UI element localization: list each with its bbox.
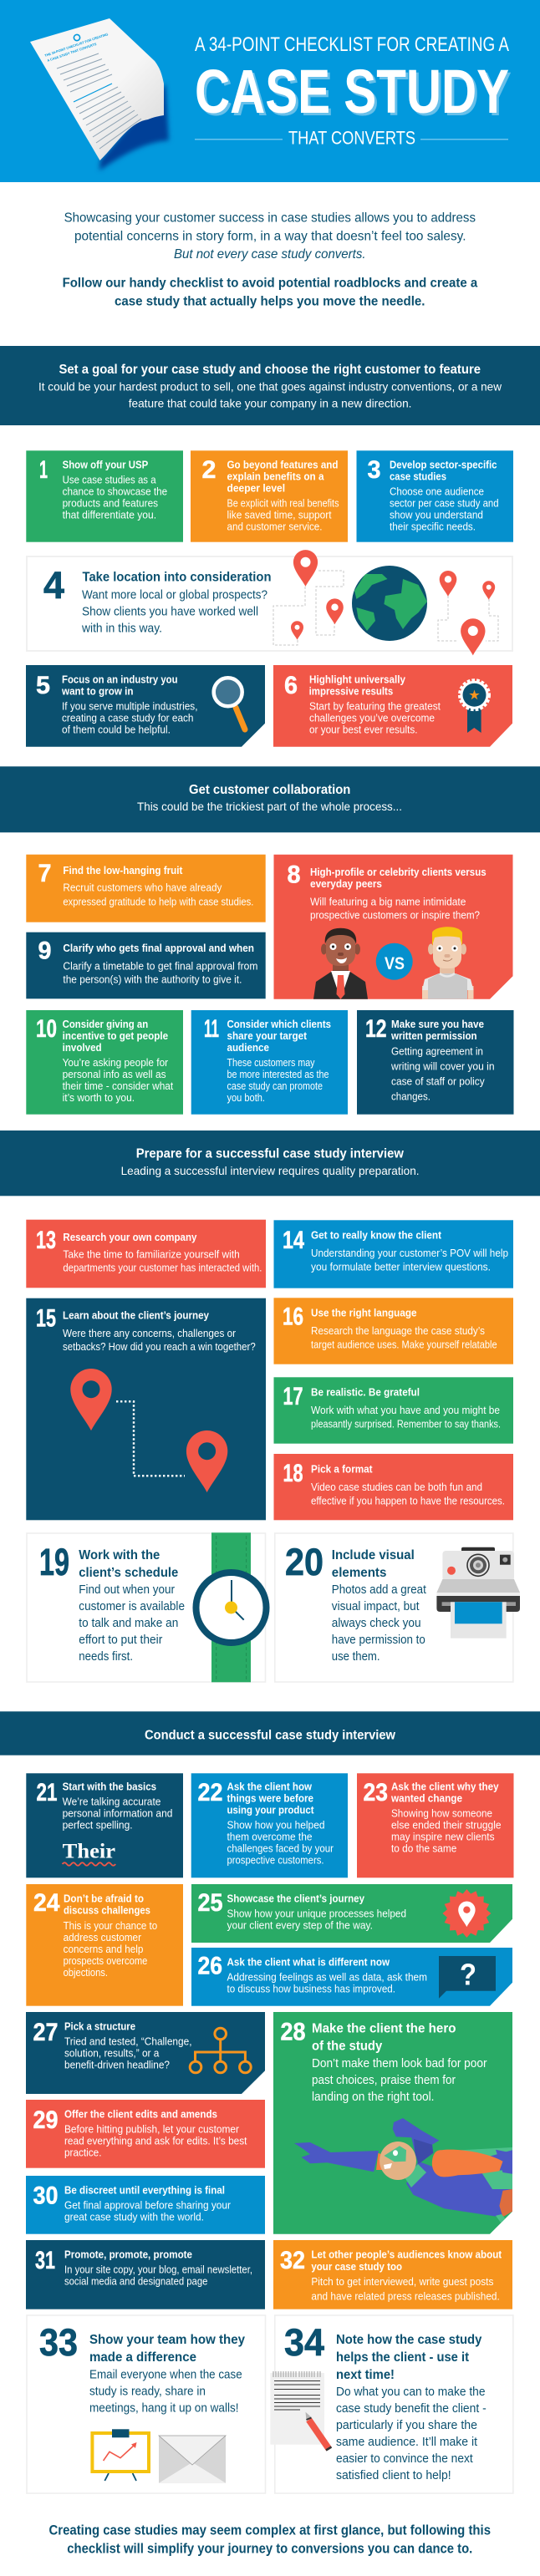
panel: card 25: 25 bbox=[197, 1889, 222, 1917]
icon: vs badge: VS bbox=[385, 954, 405, 973]
icon: hierarchy structure bbox=[190, 2028, 251, 2073]
panel: card 33: made a difference bbox=[89, 2350, 196, 2365]
panel: card 28 bbox=[273, 2012, 512, 2234]
panel: card 4 location: 4 bbox=[43, 564, 64, 607]
panel: card 19: Find out when your bbox=[79, 1583, 175, 1597]
panel: card 19: Work with the bbox=[79, 1548, 160, 1562]
panel: card 33: Show your team how they bbox=[89, 2333, 245, 2347]
icon: magnifying glass bbox=[214, 678, 245, 729]
panel: card 21: 21 bbox=[37, 1779, 57, 1806]
panel: card 7 bbox=[26, 855, 266, 922]
panel: card 27: Tried and tested, “Challenge, bbox=[64, 2036, 192, 2048]
panel: card 13: Take the time to familiarize yourself with bbox=[63, 1249, 240, 1261]
panel: card 4 location: with in this way. bbox=[81, 622, 162, 635]
panel: card 34: next time! bbox=[336, 2368, 395, 2382]
panel: card 4 location bbox=[27, 550, 512, 655]
panel: card 21: We’re talking accurate bbox=[63, 1796, 160, 1808]
intro text: potential concerns in story form, in a way that doesn’t feel too salesy. bbox=[74, 230, 466, 244]
panel: card 12: written permission bbox=[390, 1029, 477, 1042]
intro text: case study that actually helps you move the needle. bbox=[115, 294, 425, 308]
panel: card 1: Use case studies as a bbox=[63, 474, 156, 485]
panel: card 15: setbacks? How did you reach a win together? bbox=[63, 1341, 256, 1353]
panel: card 1: chance to showcase the bbox=[63, 486, 167, 498]
panel: card 32: Let other people’s audiences know about bbox=[311, 2248, 502, 2261]
panel: card 28: past choices, praise them for bbox=[312, 2074, 456, 2087]
icon: flying superhero bbox=[294, 2118, 512, 2223]
icon: presentation easel bbox=[92, 2429, 149, 2481]
panel: card 11: case study can promote bbox=[227, 1080, 323, 1092]
panel: card 16: 16 bbox=[283, 1303, 303, 1331]
closing statement: Creating case studies may seem complex at first glance, but following this bbox=[48, 2523, 491, 2538]
panel: card 29: practice. bbox=[64, 2147, 102, 2159]
panel: card 16: target audience uses. Make yourself relatable bbox=[311, 1339, 497, 1351]
panel: card 20: use them. bbox=[332, 1650, 380, 1664]
panel: card 11: 11 bbox=[204, 1015, 219, 1043]
panel: card 26 bbox=[191, 1948, 512, 2006]
panel: card 29: Offer the client edits and amends bbox=[64, 2108, 217, 2121]
panel: card 17: pleasantly surprised. Remember to say thanks. bbox=[311, 1419, 501, 1430]
panel: card 3: their specific needs. bbox=[390, 521, 476, 533]
panel: card 19: customer is available bbox=[79, 1600, 185, 1613]
panel: card 32: Pitch to get interviewed, write guest posts bbox=[311, 2276, 493, 2288]
panel: card 25 bbox=[191, 1884, 512, 1943]
icon: envelope bbox=[159, 2436, 226, 2483]
icon: checklist paper: THE 34-POINT CHECKLIST FOR CREATING bbox=[44, 32, 109, 58]
panel: card 17: Be realistic. Be grateful bbox=[311, 1386, 420, 1399]
section band: prepare for interview: Prepare for a successful case study interview bbox=[136, 1147, 404, 1161]
icon: question speech bubble: ? bbox=[460, 1958, 476, 1992]
panel: card 5: creating a case study for each bbox=[62, 712, 194, 724]
panel: card 10: 10 bbox=[36, 1015, 57, 1043]
panel: card 13: Research your own company bbox=[63, 1231, 197, 1243]
panel: card 14 bbox=[274, 1220, 513, 1288]
icon: everyday person bbox=[422, 927, 473, 999]
panel: card 7: Recruit customers who have already bbox=[63, 882, 222, 894]
panel: card 11: Consider which clients bbox=[227, 1018, 331, 1030]
intro text: Showcasing your customer success in case studies allows you to address bbox=[64, 211, 476, 226]
panel: card 4 location: Take location into consideration bbox=[82, 571, 271, 585]
panel: card 30: Get final approval before sharing your bbox=[64, 2200, 231, 2212]
panel: card 6: challenges you’ve overcome bbox=[309, 712, 435, 724]
icon: pin starburst bbox=[442, 1889, 491, 1938]
panel: card 22: Ask the client how bbox=[227, 1781, 313, 1793]
panel: card 13 bbox=[26, 1220, 266, 1288]
panel: card 12: 12 bbox=[365, 1015, 386, 1043]
intro text bbox=[63, 211, 477, 308]
panel: card 5: If you serve multiple industries, bbox=[62, 700, 197, 712]
panel: card 19 bbox=[27, 1532, 266, 1682]
panel: card 34 bbox=[270, 2315, 513, 2493]
panel: card 6: 6 bbox=[284, 672, 298, 699]
icon: businessman bbox=[313, 928, 368, 999]
panel: card 30 bbox=[26, 2176, 265, 2234]
panel: card 2: explain benefits on a bbox=[227, 470, 324, 482]
panel: card 6: Highlight universally bbox=[309, 673, 406, 686]
section band: set a goal: feature that could take your company in a new direction. bbox=[129, 397, 411, 410]
panel: card 28: Make the client the hero bbox=[312, 2022, 456, 2036]
panel: card 28: 28 bbox=[281, 2019, 306, 2046]
panel: card 28: of the study bbox=[312, 2040, 382, 2054]
panel: card 30: Be discreet until everything is final bbox=[64, 2184, 225, 2197]
panel: card 26: to discuss how business has improved. bbox=[227, 1984, 395, 1995]
panel: card 25: your client every step of the way. bbox=[227, 1920, 373, 1932]
panel: card 10: You’re asking people for bbox=[63, 1057, 168, 1069]
panel: card 8: High-profile or celebrity clients versus bbox=[310, 866, 487, 878]
section band: prepare for interview bbox=[0, 1130, 540, 1196]
panel: card 23: to do the same bbox=[391, 1843, 456, 1855]
panel: card 20: elements bbox=[332, 1566, 386, 1580]
panel: card 24: This is your chance to bbox=[64, 1920, 157, 1932]
panel: card 5 bbox=[26, 665, 265, 747]
panel: card 6: impressive results bbox=[309, 685, 393, 698]
panel: card 2: Go beyond features and bbox=[227, 458, 339, 470]
panel: card 27: Pick a structure bbox=[64, 2020, 135, 2033]
panel: card 19: to talk and make an bbox=[79, 1617, 178, 1630]
icon: checklist paper: A CASE STUDY THAT CONVERTS bbox=[47, 42, 97, 63]
panel: card 29: Before hitting publish, let your customer bbox=[64, 2124, 239, 2136]
panel: card 7: 7 bbox=[38, 860, 52, 887]
panel: card 23: wanted change bbox=[390, 1792, 462, 1805]
panel: card 8: everyday peers bbox=[310, 877, 382, 890]
panel: card 24: concerns and help bbox=[64, 1943, 143, 1955]
panel: card 2: deeper level bbox=[227, 481, 285, 494]
panel: card 15: 15 bbox=[36, 1305, 56, 1333]
panel: card 4 location: Want more local or global prospects? bbox=[82, 588, 267, 602]
panel: card 10: personal info as well as bbox=[63, 1069, 166, 1080]
panel: card 33: Email everyone when the case bbox=[89, 2368, 242, 2381]
panel: card 7: Find the low-hanging fruit bbox=[63, 864, 183, 876]
panel: card 12 bbox=[357, 1010, 513, 1115]
panel: card 21: perfect spelling. bbox=[63, 1820, 133, 1832]
header banner bbox=[0, 0, 540, 182]
panel: card 11: you both. bbox=[227, 1092, 265, 1104]
panel: card 14: you formulate better interview questions. bbox=[311, 1262, 491, 1273]
panel: card 24: Don’t be afraid to bbox=[64, 1893, 144, 1905]
panel: card 32: 32 bbox=[280, 2247, 305, 2274]
panel: card 20: Include visual bbox=[332, 1548, 415, 1562]
panel: card 21 bbox=[26, 1773, 183, 1877]
icon: misspelled word: Their bbox=[63, 1840, 115, 1862]
panel: card 19: client’s schedule bbox=[79, 1566, 178, 1580]
panel: card 31 bbox=[26, 2240, 265, 2309]
panel: card 30: great case study with the world. bbox=[64, 2212, 204, 2223]
panel: card 11: These customers may bbox=[227, 1057, 315, 1069]
panel: card 12: Getting agreement in bbox=[391, 1045, 483, 1057]
panel: card 29 bbox=[26, 2100, 265, 2168]
panel: card 9: the person(s) with the authority to give it. bbox=[63, 974, 242, 986]
panel: card 12: changes. bbox=[391, 1090, 430, 1102]
panel: card 20: have permission to bbox=[332, 1633, 425, 1647]
panel: card 28: landing on the right tool. bbox=[312, 2091, 435, 2104]
closing statement bbox=[48, 2523, 491, 2556]
panel: card 14: 14 bbox=[283, 1227, 304, 1254]
panel: card 19: needs first. bbox=[79, 1650, 133, 1664]
panel: card 24 bbox=[26, 1884, 183, 2006]
icon: checklist paper bbox=[30, 18, 169, 170]
panel: card 23: Showing how someone bbox=[391, 1808, 492, 1820]
panel: card 7: expressed gratitude to help with case studies. bbox=[63, 896, 253, 907]
icon: journey pins and route bbox=[70, 1369, 227, 1492]
panel: card 34: case study benefit the client - bbox=[336, 2402, 487, 2416]
panel: card 9: 9 bbox=[38, 937, 52, 965]
panel: card 1: Show off your USP bbox=[63, 458, 148, 470]
panel: card 18: 18 bbox=[283, 1460, 303, 1487]
panel: card 23: Ask the client why they bbox=[391, 1781, 499, 1793]
panel: card 31: 31 bbox=[35, 2247, 55, 2274]
panel: card 9: Clarify who gets final approval and when bbox=[63, 942, 254, 954]
panel: card 3: case studies bbox=[390, 470, 446, 482]
panel: card 20: 20 bbox=[285, 1541, 323, 1583]
panel: card 19: effort to put their bbox=[79, 1633, 162, 1647]
panel: card 10: their time - consider what bbox=[63, 1080, 174, 1092]
panel: card 33: 33 bbox=[39, 2321, 78, 2364]
panel: card 34: helps the client - use it bbox=[336, 2350, 470, 2365]
panel: card 21: personal information and bbox=[63, 1808, 172, 1820]
panel: card 23: 23 bbox=[363, 1779, 388, 1806]
panel: card 5: Focus on an industry you bbox=[62, 673, 178, 686]
title line three: THAT CONVERTS bbox=[288, 128, 415, 149]
panel: card 5: of them could be helpful. bbox=[62, 724, 171, 735]
panel: card 15: Learn about the client’s journey bbox=[63, 1309, 210, 1322]
panel: card 20 bbox=[275, 1533, 520, 1682]
panel: card 8: 8 bbox=[288, 861, 301, 889]
section band: set a goal: It could be your hardest product to sell, one that goes against industry conventions, or a new bbox=[38, 380, 502, 394]
panel: card 10: incentive to get people bbox=[63, 1029, 168, 1042]
panel: card 3: Choose one audience bbox=[390, 486, 484, 498]
panel: card 16: Use the right language bbox=[311, 1307, 417, 1319]
panel: card 9 bbox=[26, 932, 266, 998]
panel: card 20: always check you bbox=[332, 1617, 421, 1630]
panel: card 26: Ask the client what is different now bbox=[227, 1956, 390, 1969]
panel: card 16 bbox=[274, 1298, 513, 1364]
icon: notepad and pen bbox=[270, 2371, 331, 2450]
panel: card 16: Research the language the case study’s bbox=[311, 1325, 485, 1337]
panel: card 33: meetings, hang it up on walls! bbox=[89, 2401, 239, 2415]
panel: card 5: 5 bbox=[36, 672, 50, 699]
panel: card 5: want to grow in bbox=[61, 685, 134, 698]
panel: card 18: Video case studies can be both fun and bbox=[311, 1481, 482, 1493]
panel: card 17: Work with what you have and you might be bbox=[311, 1405, 500, 1416]
panel: card 22: prospective customers. bbox=[227, 1855, 324, 1867]
panel: card 12: Make sure you have bbox=[391, 1018, 484, 1030]
panel: card 18: Pick a format bbox=[311, 1463, 373, 1476]
panel: card 31: In your site copy, your blog, email newsletter, bbox=[64, 2264, 252, 2276]
panel: card 1: that differentiate you. bbox=[63, 510, 156, 521]
panel: card 10: Consider giving an bbox=[63, 1018, 148, 1030]
panel: card 6: or your best ever results. bbox=[309, 724, 418, 735]
panel: card 24: prospects overcome bbox=[64, 1955, 147, 1967]
panel: card 22: Show how you helped bbox=[227, 1820, 325, 1832]
panel: card 24: address customer bbox=[64, 1932, 141, 1943]
panel: card 9: Clarify a timetable to get final approval from bbox=[63, 961, 257, 973]
panel: card 22: using your product bbox=[227, 1804, 314, 1816]
panel: card 8 bbox=[274, 855, 513, 999]
panel: card 2: 2 bbox=[202, 456, 216, 484]
panel: card 8: prospective customers or inspire them? bbox=[310, 909, 480, 921]
panel: card 3: Develop sector-specific bbox=[390, 458, 497, 470]
panel: card 13: 13 bbox=[36, 1227, 56, 1254]
panel: card 26: 26 bbox=[197, 1953, 222, 1980]
panel: card 18 bbox=[274, 1454, 513, 1520]
panel: card 25: Showcase the client’s journey bbox=[227, 1893, 365, 1905]
panel: card 29: 29 bbox=[33, 2106, 59, 2134]
panel: card 34: particularly if you share the bbox=[336, 2419, 477, 2432]
panel: card 2: like saved time, support bbox=[227, 510, 332, 521]
panel: card 34: Note how the case study bbox=[336, 2333, 481, 2347]
panel: card 1: 1 bbox=[39, 456, 48, 484]
panel: card 34: satisfied client to help! bbox=[336, 2469, 451, 2482]
panel: card 23: may inspire new clients bbox=[391, 1832, 495, 1843]
panel: card 34: Do what you can to make the bbox=[336, 2385, 485, 2399]
panel: card 27: 27 bbox=[33, 2019, 59, 2046]
icon: map pins bbox=[291, 550, 495, 655]
panel: card 33 bbox=[27, 2315, 266, 2493]
panel: card 31: Promote, promote, promote bbox=[64, 2248, 192, 2261]
panel: card 22: them overcome the bbox=[227, 1832, 313, 1843]
section band: customer collaboration: This could be the trickiest part of the whole process... bbox=[137, 800, 402, 813]
panel: card 20: Photos add a great bbox=[332, 1583, 426, 1597]
section band: set a goal bbox=[0, 346, 540, 425]
panel: card 24: 24 bbox=[33, 1889, 60, 1917]
panel: card 32 bbox=[273, 2240, 512, 2309]
panel: card 11: be more interested as the bbox=[227, 1069, 329, 1080]
section band: customer collaboration: Get customer collaboration bbox=[189, 783, 350, 797]
panel: card 21: Start with the basics bbox=[63, 1781, 156, 1793]
intro text: Follow our handy checklist to avoid potential roadblocks and create a bbox=[63, 276, 477, 290]
panel: card 6: Start by featuring the greatest bbox=[309, 700, 441, 712]
panel: card 29: read everything and ask for edits. It’s best bbox=[64, 2136, 247, 2147]
section band: set a goal: Set a goal for your case study and choose the right customer to feature bbox=[59, 363, 481, 377]
panel: card 11 bbox=[191, 1010, 348, 1115]
panel: card 3: sector per case study and bbox=[390, 498, 499, 510]
panel: card 22: 22 bbox=[197, 1779, 222, 1806]
panel: card 12: case of staff or policy bbox=[391, 1075, 485, 1087]
icon: wristwatch bbox=[196, 1532, 266, 1682]
panel: card 10: involved bbox=[63, 1041, 102, 1054]
panel: card 4 location: Show clients you have worked well bbox=[82, 605, 258, 618]
panel: card 23: else ended their struggle bbox=[391, 1820, 502, 1832]
panel: card 32: your case study too bbox=[311, 2260, 402, 2273]
panel: card 2: Be explicit with real benefits bbox=[227, 498, 339, 510]
panel: card 11: share your target bbox=[227, 1029, 308, 1042]
panel: card 26: Addressing feelings as well as data, ask them bbox=[227, 1972, 427, 1984]
panel: card 11: audience bbox=[227, 1041, 269, 1054]
icon: dashed routes bbox=[273, 571, 498, 645]
panel: card 20: visual impact, but bbox=[332, 1600, 420, 1613]
panel: card 34: same audience. It’ll make it bbox=[336, 2436, 477, 2449]
closing statement: checklist will simplify your journey to conversions you can dance to. bbox=[67, 2541, 472, 2556]
panel: card 10: it’s worth to you. bbox=[63, 1092, 135, 1104]
panel: card 1 bbox=[26, 450, 183, 542]
section band: conduct interview bbox=[0, 1711, 540, 1755]
panel: card 18: effective if you happen to have the resources. bbox=[311, 1496, 505, 1507]
panel: card 15 bbox=[26, 1298, 266, 1520]
icon: globe bbox=[352, 566, 427, 641]
panel: card 34: easier to convince the next bbox=[336, 2452, 473, 2466]
panel: card 13: departments your customer has interacted with. bbox=[63, 1263, 262, 1274]
panel: card 12: writing will cover you in bbox=[390, 1060, 495, 1072]
panel: card 27: solution, results,” or a bbox=[64, 2048, 159, 2060]
panel: card 2 bbox=[191, 450, 348, 542]
panel: card 17: 17 bbox=[283, 1383, 303, 1410]
panel: card 22: challenges faced by your bbox=[227, 1843, 334, 1855]
intro text: But not every case study converts. bbox=[174, 247, 366, 262]
panel: card 14: Understanding your customer’s POV will help bbox=[311, 1247, 508, 1259]
panel: card 34: 34 bbox=[284, 2321, 324, 2364]
section band: customer collaboration bbox=[0, 766, 540, 832]
panel: card 3: 3 bbox=[368, 456, 381, 484]
panel: card 22 bbox=[191, 1773, 348, 1877]
panel: card 25: Show how your unique processes helped bbox=[227, 1908, 406, 1920]
panel: card 24: objections. bbox=[64, 1967, 108, 1979]
panel: card 23 bbox=[357, 1773, 513, 1877]
panel: card 27 bbox=[26, 2012, 265, 2094]
icon: question speech bubble bbox=[439, 1956, 496, 1999]
panel: card 30: 30 bbox=[33, 2182, 59, 2210]
icon: vs badge bbox=[376, 943, 413, 980]
panel: card 31: social media and designated page bbox=[64, 2276, 207, 2288]
panel: card 32: and have related press releases published. bbox=[311, 2291, 500, 2303]
panel: card 19: 19 bbox=[39, 1541, 69, 1583]
panel: card 22: things were before bbox=[227, 1792, 313, 1805]
icon: instant camera bbox=[436, 1547, 520, 1639]
panel: card 17 bbox=[274, 1377, 513, 1444]
panel: card 27: benefit-driven headline? bbox=[64, 2060, 170, 2071]
icon: award ribbon bbox=[460, 681, 488, 733]
panel: card 3: show you understand bbox=[390, 510, 483, 521]
panel: card 2: and customer service. bbox=[227, 521, 323, 533]
panel: card 15: Were there any concerns, challenges or bbox=[63, 1328, 236, 1339]
panel: card 24: discuss challenges bbox=[64, 1904, 150, 1917]
panel: card 10 bbox=[26, 1010, 183, 1115]
panel: card 1: products and features bbox=[63, 498, 158, 510]
section band: prepare for interview: Leading a successful interview requires quality preparation. bbox=[121, 1164, 420, 1177]
panel: card 8: Will featuring a big name intimidate bbox=[310, 896, 466, 907]
panel: card 3 bbox=[356, 450, 513, 542]
section band: conduct interview: Conduct a successful case study interview bbox=[145, 1729, 396, 1743]
panel: card 14: Get to really know the client bbox=[311, 1229, 442, 1242]
panel: card 6 bbox=[273, 665, 512, 747]
panel: card 28: Don’t make them look bad for poor bbox=[312, 2057, 487, 2070]
panel: card 33: study is ready, share in bbox=[89, 2385, 206, 2398]
